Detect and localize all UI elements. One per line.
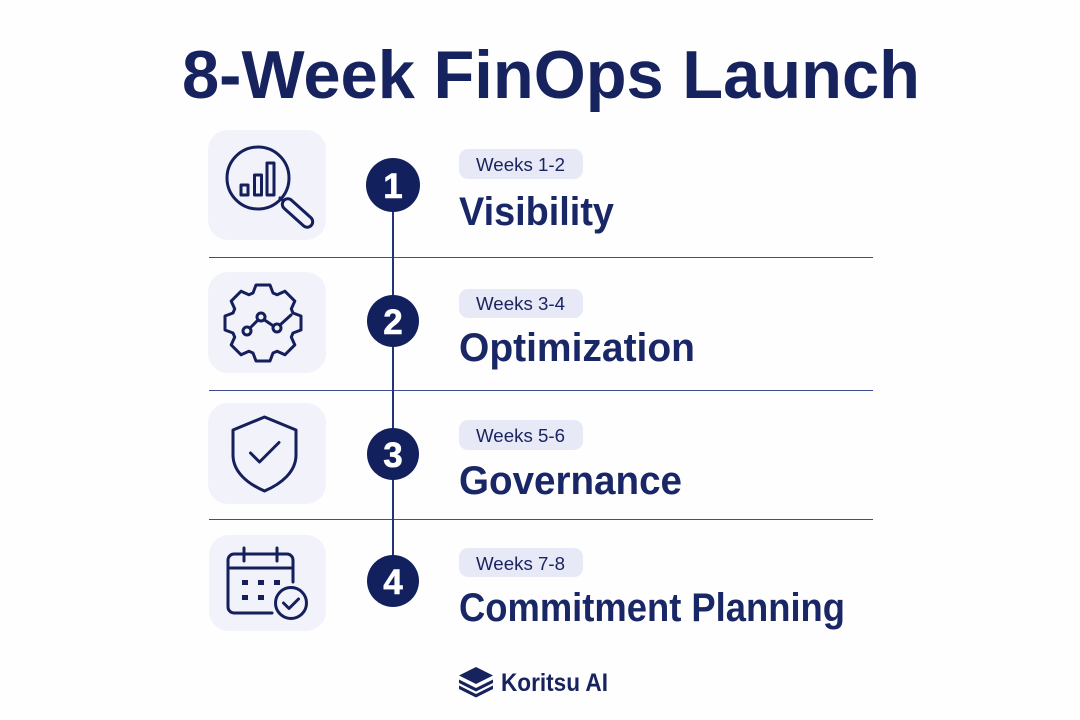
week label 3: Weeks 5-6 [476,426,565,446]
week label 2 [459,289,583,318]
heading: governance: Governance [459,459,682,503]
week label 2: Weeks 3-4 [476,294,565,314]
step number 2 [367,295,419,347]
step number 2: 2 [383,303,403,342]
icon: stacked layers [459,667,493,698]
heading: optimization: Optimization [459,326,695,370]
timeline connector [392,185,394,581]
week label 1 [459,149,583,179]
week label 4: Weeks 7-8 [476,554,565,574]
step number 3: 3 [383,436,403,475]
step number 3 [367,428,419,480]
step number 1: 1 [383,167,403,206]
panel: step 4 commitment planning [209,535,845,631]
icon: calendar with check [209,535,326,631]
heading: visibility: Visibility [459,190,615,234]
panel: step 1 visibility [208,130,615,240]
icon: gear with trend line [208,272,326,373]
step number 4 [367,555,419,607]
icon: magnifier with bar chart [208,130,326,240]
week label 1: Weeks 1-2 [476,155,565,175]
week label 4 [459,548,583,577]
week label 3 [459,420,583,450]
step number 4: 4 [383,563,403,602]
panel: step 3 governance [208,403,682,504]
title: 8-Week FinOps Launch [182,37,920,113]
logo: Koritsu AI [459,667,608,698]
panel: step 2 optimization [208,272,695,373]
heading: commitment planning: Commitment Planning [459,586,845,630]
step number 1 [366,158,420,212]
icon: shield with check [208,403,326,504]
row dividers [209,258,873,520]
brand name: Koritsu AI [501,669,608,697]
